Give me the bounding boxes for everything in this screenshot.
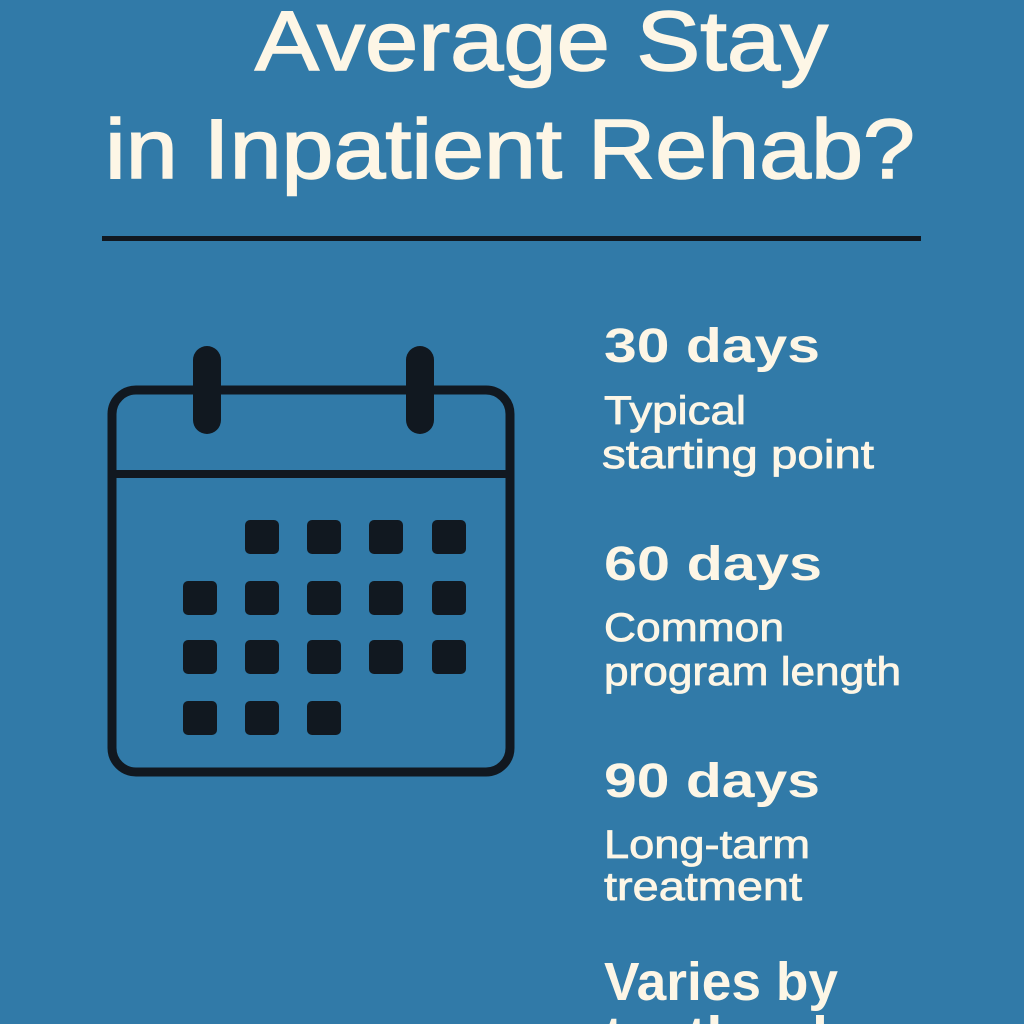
title (105, 0, 915, 196)
icon: calendar (112, 360, 510, 772)
stat: 60 days (604, 538, 901, 694)
stat: 90 days: Long-tarm (604, 823, 810, 867)
stat: 30 days: Typical (604, 389, 746, 433)
stat: 60 days: Common (604, 606, 784, 650)
stat: 30 days: 30 days (604, 320, 820, 373)
stat: 60 days: program length (604, 650, 901, 694)
stat: 30 days: starting point (602, 433, 874, 477)
title: in Inpatient Rehab? (105, 102, 915, 196)
stat: 60 days: 60 days (604, 538, 822, 591)
stat: 90 days (604, 755, 820, 909)
stat: 90 days: 90 days (604, 755, 820, 808)
stat: 30 days (602, 320, 874, 477)
stat: varies: Varies by (604, 952, 838, 1012)
stat: 90 days: treatment (604, 865, 802, 909)
